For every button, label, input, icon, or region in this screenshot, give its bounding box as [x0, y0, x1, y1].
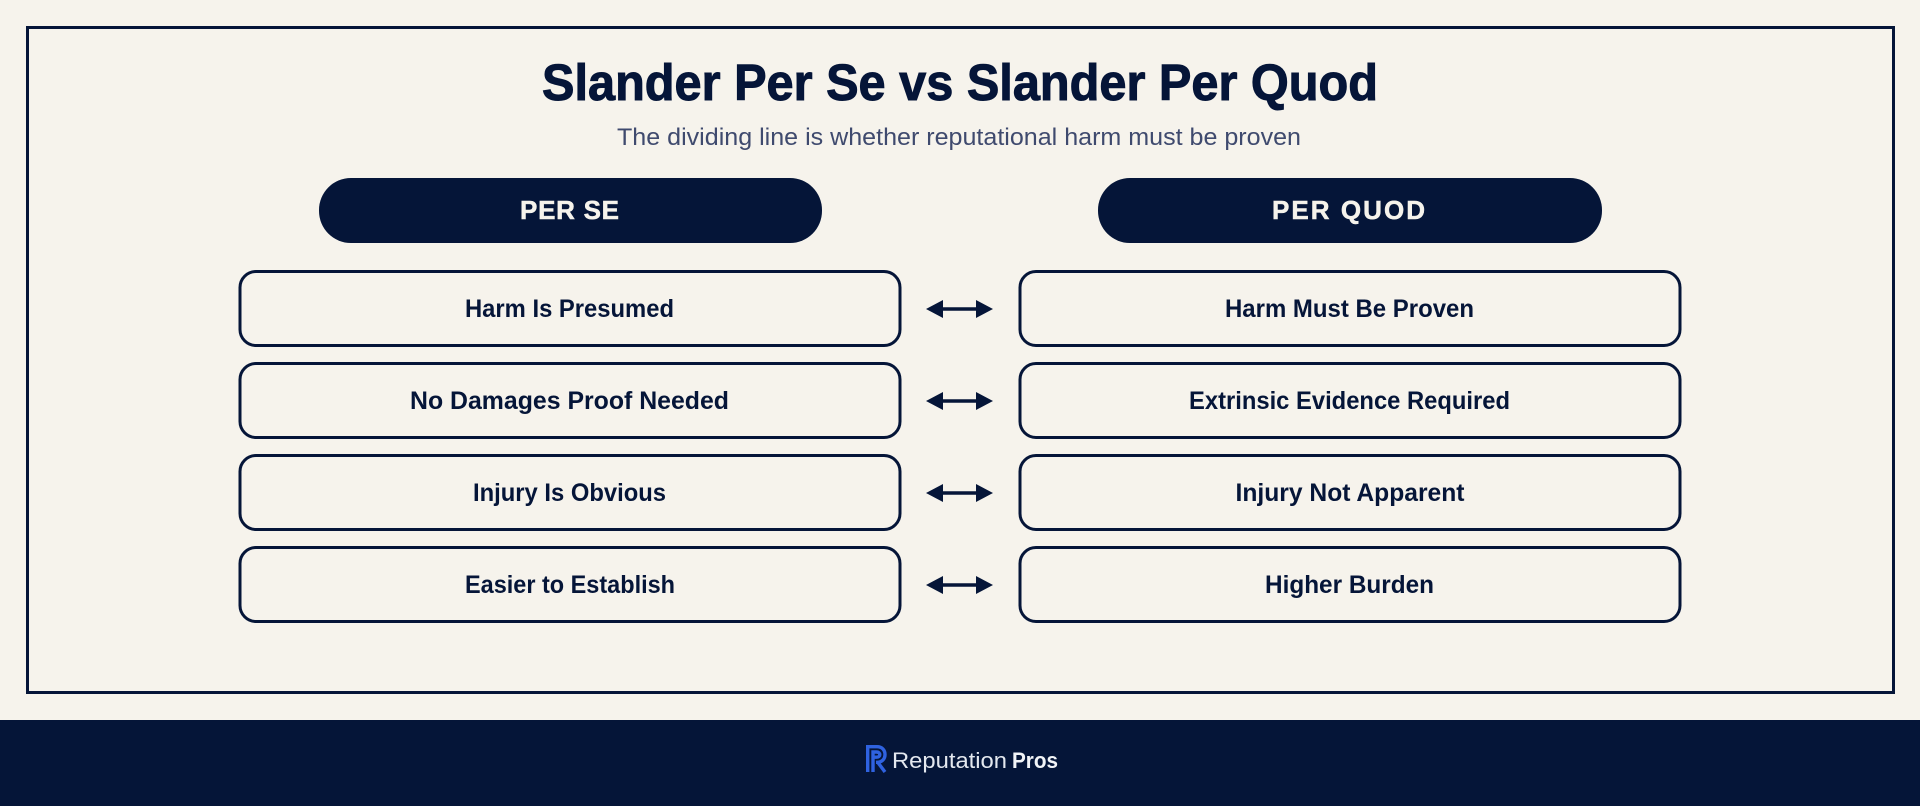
per se item: easier to establish	[240, 548, 900, 622]
row 3: injury	[240, 456, 1680, 530]
footer logo	[868, 747, 1058, 773]
per se item: easier to establish: Easier to Establish	[465, 571, 675, 599]
arrow: harm comparison	[926, 300, 993, 318]
column header: per quod: PER QUOD	[1272, 195, 1425, 225]
per se item: no damages proof needed: No Damages Proof Needed	[410, 387, 729, 415]
per quod item: higher burden	[1020, 548, 1680, 622]
icon: reputation pros R mark	[868, 747, 885, 772]
per quod item: extrinsic evidence required: Extrinsic Evidence Required	[1189, 387, 1510, 415]
column header: per se	[319, 178, 822, 243]
arrow: injury comparison	[926, 484, 993, 502]
per quod item: injury not apparent	[1020, 456, 1680, 530]
column header: per quod	[1098, 178, 1602, 243]
row 4: burden	[240, 548, 1680, 622]
per quod item: harm must be proven: Harm Must Be Proven	[1225, 295, 1474, 323]
per quod item: harm must be proven	[1020, 272, 1680, 346]
per quod item: extrinsic evidence required	[1020, 364, 1680, 438]
logo wordmark: Reputation	[892, 748, 1007, 773]
per quod item: higher burden: Higher Burden	[1265, 571, 1434, 599]
subtitle: The dividing line is whether reputational harm must be proven	[617, 124, 1301, 151]
column header: per se: PER SE	[520, 195, 619, 225]
title: Slander Per Se vs Slander Per Quod	[542, 54, 1378, 111]
per quod item: injury not apparent: Injury Not Apparent	[1236, 479, 1465, 507]
row 2: proof	[240, 364, 1680, 438]
per se item: harm is presumed	[240, 272, 900, 346]
per se item: harm is presumed: Harm Is Presumed	[465, 295, 674, 323]
per se item: injury is obvious: Injury Is Obvious	[473, 479, 666, 507]
arrow: proof comparison	[926, 392, 993, 410]
arrow: burden comparison	[926, 576, 993, 594]
row 1: harm	[240, 272, 1680, 346]
per se item: no damages proof needed	[240, 364, 900, 438]
footer logo: Pros	[1012, 748, 1058, 773]
footer bar	[0, 720, 1920, 806]
per se item: injury is obvious	[240, 456, 900, 530]
